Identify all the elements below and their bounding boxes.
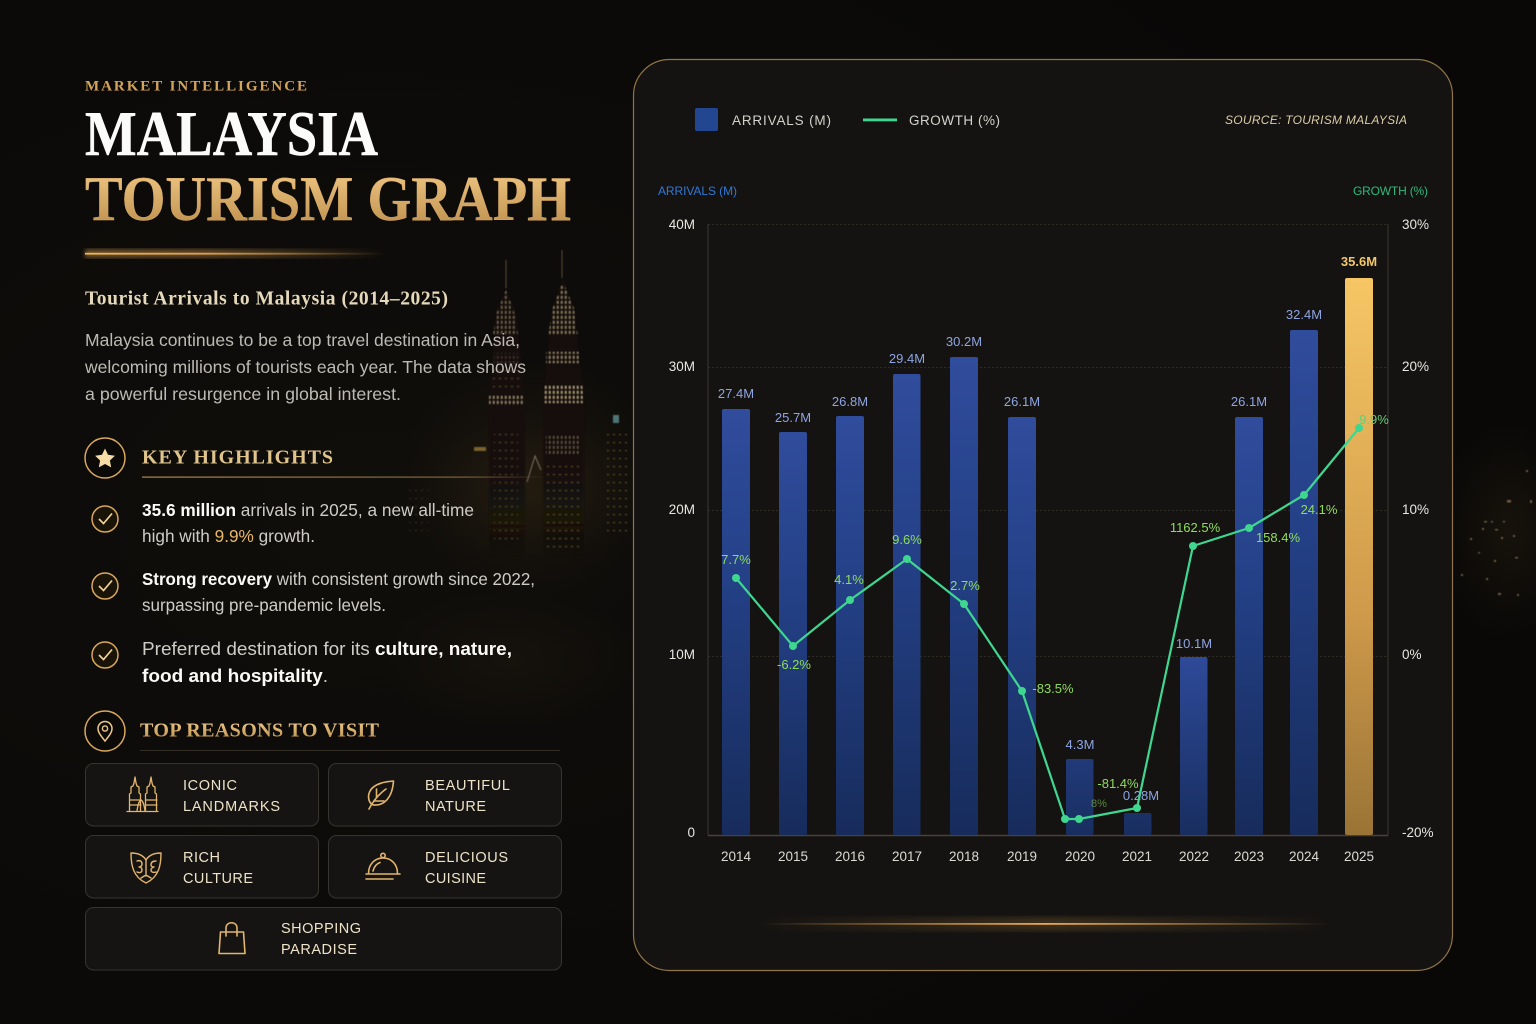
eyebrow: MARKET INTELLIGENCE — [85, 78, 307, 94]
card: beautiful nature: NATURE — [425, 799, 486, 815]
card: iconic landmarks: LANDMARKS — [183, 799, 280, 815]
year labels: 2023 — [1234, 849, 1264, 864]
icon: check — [92, 573, 118, 599]
intro text: Malaysia continues to be a top travel destination in Asia, — [85, 330, 520, 350]
combo chart — [669, 217, 1434, 864]
highlight 1: high with 9.9% growth. — [142, 526, 315, 546]
icon: shopping bag — [219, 923, 245, 954]
title rule — [85, 249, 385, 258]
growth value labels: 7.7% — [721, 552, 751, 567]
title: TOURISM GRAPH — [85, 164, 571, 234]
bar value labels: 32.4M — [1286, 307, 1322, 322]
highlight 2: Strong recovery with consistent growth since 2022, — [142, 569, 535, 589]
city lights: right edge — [1461, 470, 1532, 596]
year labels: 2014 — [721, 849, 752, 864]
growth value labels: 2.7% — [950, 578, 980, 593]
axis titles: ARRIVALS (M) — [658, 184, 737, 198]
legend — [695, 108, 1000, 131]
year labels: 2021 — [1122, 849, 1152, 864]
axis titles: GROWTH (%) — [1353, 184, 1428, 198]
bar value labels: 29.4M — [889, 351, 925, 366]
intro text: a powerful resurgence in global interest. — [85, 384, 401, 404]
card: iconic landmarks — [86, 764, 318, 826]
card: beautiful nature: BEAUTIFUL — [425, 778, 510, 794]
left axis labels: 20M — [669, 502, 695, 517]
icon: twin towers — [127, 777, 158, 812]
title: MALAYSIA — [85, 99, 378, 169]
icon: cultural mask — [131, 853, 161, 883]
legend: GROWTH (%) — [909, 113, 1000, 128]
bar value labels: 30.2M — [946, 334, 982, 349]
left axis labels — [669, 217, 695, 840]
growth value labels: 8% — [1091, 798, 1107, 810]
card: rich culture: RICH — [183, 850, 220, 866]
growth value labels: 9.9% — [1359, 412, 1389, 427]
intro text: welcoming millions of tourists each year. The data shows — [84, 357, 526, 377]
source note: SOURCE: TOURISM MALAYSIA — [1225, 113, 1407, 127]
card: rich culture: CULTURE — [183, 871, 253, 887]
growth value labels: -6.2% — [777, 657, 811, 672]
bars: arrivals — [722, 278, 1373, 835]
growth value labels: 1162.5% — [1170, 520, 1221, 535]
heading: key highlights: KEY HIGHLIGHTS — [142, 446, 333, 468]
bar value labels: 0.28M — [1123, 788, 1159, 803]
growth value labels: 24.1% — [1301, 502, 1338, 517]
right axis labels: 10% — [1402, 502, 1429, 517]
skyline: twin towers and city lights — [408, 250, 630, 560]
icon: leaf — [368, 781, 394, 809]
bar value labels: 10.1M — [1176, 636, 1212, 651]
card: iconic landmarks: ICONIC — [183, 778, 237, 794]
card: delicious cuisine — [328, 836, 562, 898]
bar value labels — [718, 254, 1377, 803]
left axis labels: 40M — [669, 217, 695, 232]
highlight 3: food and hospitality . — [142, 665, 328, 686]
panel glow line — [760, 917, 1330, 931]
year labels: 2016 — [835, 849, 865, 864]
subtitle: Tourist Arrivals to Malaysia (2014–2025) — [85, 288, 448, 310]
growth value labels: 158.4% — [1256, 530, 1300, 545]
right axis labels: 20% — [1402, 359, 1429, 374]
card: shopping paradise — [86, 908, 562, 970]
bar value labels: 27.4M — [718, 386, 754, 401]
icon: check — [92, 642, 118, 668]
growth value labels: -83.5% — [1032, 681, 1074, 696]
highlight 2 — [92, 569, 535, 615]
year labels: 2024 — [1289, 849, 1320, 864]
intro text — [84, 330, 526, 404]
left axis labels: 10M — [669, 647, 695, 662]
highlight 1: 35.6 million arrivals in 2025, a new all-time — [142, 500, 474, 520]
year labels: 2019 — [1007, 849, 1037, 864]
year labels — [721, 849, 1374, 864]
grid and axes — [708, 224, 1388, 836]
bar value labels: 26.1M — [1004, 394, 1040, 409]
legend: ARRIVALS (M) — [732, 113, 831, 128]
year labels: 2020 — [1065, 849, 1095, 864]
bar value labels: 26.8M — [832, 394, 868, 409]
right axis labels: 0% — [1402, 647, 1422, 662]
card: delicious cuisine: CUISINE — [425, 871, 486, 887]
right axis labels: -20% — [1402, 825, 1434, 840]
growth line — [732, 424, 1363, 823]
card: shopping paradise: SHOPPING — [281, 921, 361, 937]
highlight 3 — [92, 638, 512, 686]
growth value labels: -81.4% — [1097, 776, 1139, 791]
left axis labels: 30M — [669, 359, 695, 374]
year labels: 2022 — [1179, 849, 1209, 864]
right axis labels: 30% — [1402, 217, 1429, 232]
icon: check — [92, 506, 118, 532]
bar value labels: 25.7M — [775, 410, 811, 425]
growth value labels: 9.6% — [892, 532, 922, 547]
year labels: 2015 — [778, 849, 808, 864]
highlight 1 — [92, 500, 474, 546]
left axis labels: 0 — [687, 825, 695, 840]
card: delicious cuisine: DELICIOUS — [425, 850, 508, 866]
right axis labels — [1402, 217, 1434, 840]
icon: cloche — [366, 853, 400, 879]
bar value labels: 35.6M — [1341, 254, 1377, 269]
year labels: 2025 — [1344, 849, 1374, 864]
bar value labels: 26.1M — [1231, 394, 1267, 409]
panel: chart — [634, 60, 1452, 970]
year labels: 2017 — [892, 849, 922, 864]
highlight 2: surpassing pre-pandemic levels. — [142, 595, 386, 615]
bar value labels: 4.3M — [1066, 737, 1094, 752]
title — [85, 99, 571, 234]
growth value labels — [721, 412, 1389, 810]
heading: top reasons: TOP REASONS TO VISIT — [140, 720, 380, 742]
card: shopping paradise: PARADISE — [281, 942, 357, 958]
year labels: 2018 — [949, 849, 979, 864]
card: rich culture — [86, 836, 318, 898]
heading: key highlights — [85, 438, 547, 478]
card: beautiful nature — [328, 764, 562, 826]
highlight 3: Preferred destination for its culture, nature, — [142, 638, 512, 659]
icon: star badge — [85, 438, 125, 478]
icon: map pin badge — [85, 711, 125, 751]
heading: top reasons — [85, 711, 560, 751]
axis titles — [658, 184, 1428, 198]
growth value labels: 4.1% — [834, 572, 864, 587]
